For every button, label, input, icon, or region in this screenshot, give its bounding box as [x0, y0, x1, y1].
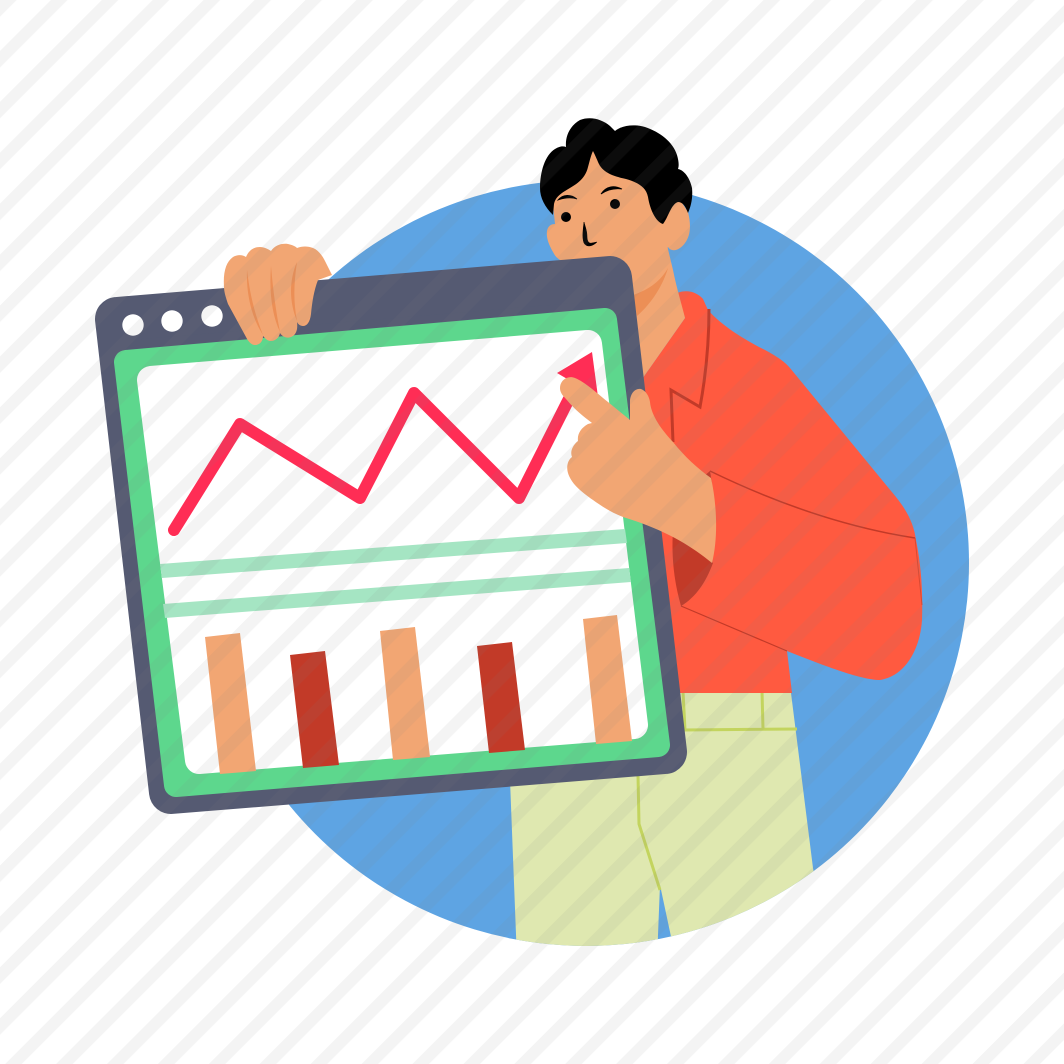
neck shadow	[633, 268, 668, 316]
window dot 1	[122, 314, 144, 336]
neck	[600, 240, 685, 440]
eyebrows	[558, 187, 622, 200]
hair	[540, 118, 692, 224]
eye right	[610, 199, 620, 209]
blue background circle	[203, 180, 969, 946]
window dot 3	[201, 305, 223, 327]
hand gripping top of board	[224, 244, 332, 345]
nose	[583, 222, 597, 246]
sleeve notch	[703, 471, 712, 483]
board frame	[117, 278, 665, 792]
window dot 2	[161, 310, 183, 332]
green panel	[126, 320, 658, 785]
white chart area	[151, 344, 634, 760]
finger creases	[247, 262, 297, 335]
sleeve opening	[672, 530, 713, 606]
shirt	[620, 291, 922, 693]
rising line chart with arrow	[174, 352, 598, 530]
person	[508, 118, 922, 960]
pointing hand and forearm	[560, 377, 716, 563]
face	[547, 145, 690, 285]
divider lines	[160, 529, 631, 618]
pants	[510, 693, 814, 946]
browser window board	[117, 278, 665, 792]
head	[540, 118, 692, 285]
bar chart	[205, 615, 632, 774]
eye left	[561, 212, 571, 222]
